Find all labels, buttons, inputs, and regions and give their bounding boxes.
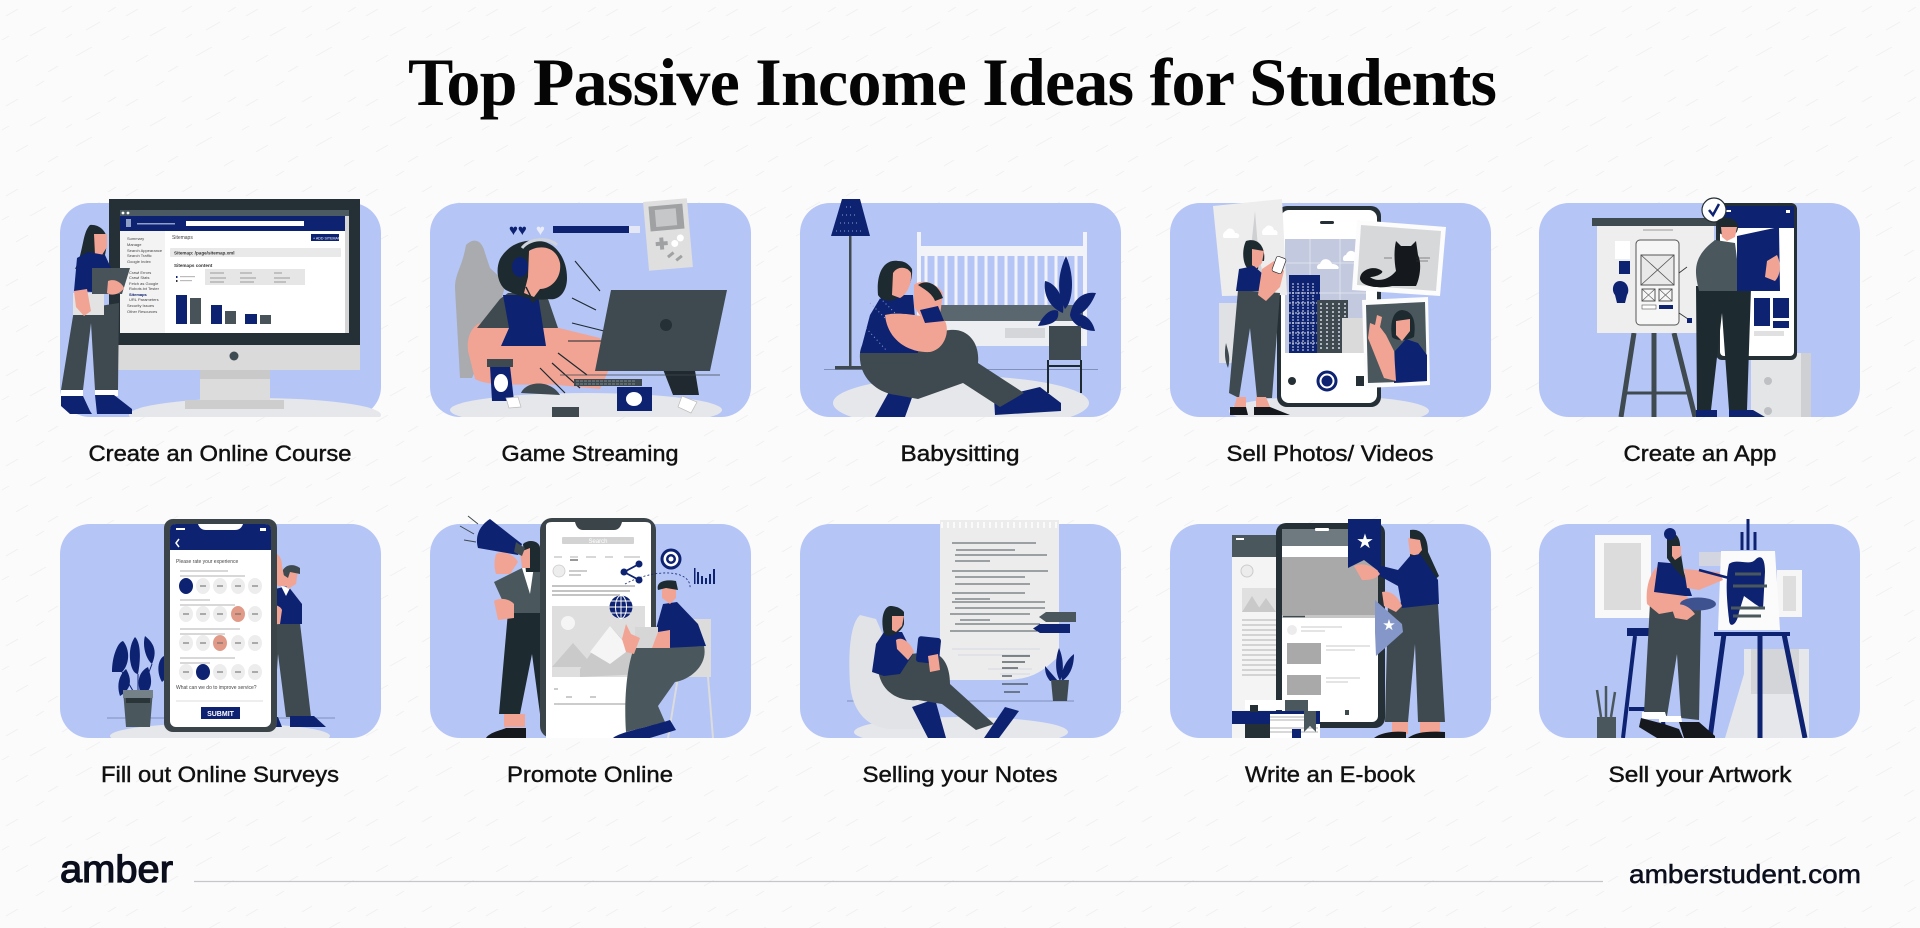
icon: paper bag <box>1725 649 1809 738</box>
icon: smartphone camera <box>1277 206 1381 407</box>
icon: potted plant <box>1038 256 1096 393</box>
panel: promote online <box>430 516 751 738</box>
icon: desktop monitor: Crawl Errors <box>129 270 151 275</box>
icon: gaming chair <box>455 241 506 378</box>
icon: baby crib <box>917 232 1087 346</box>
icon: bean bag chair <box>849 615 935 729</box>
figure: woman with megaphone <box>460 516 540 738</box>
label: sell photos/ videos: Sell Photos/ Videos <box>1226 441 1434 466</box>
submit button: SUBMIT <box>207 711 235 718</box>
bar chart <box>694 568 715 584</box>
icon: desktop monitor: Sitemaps content <box>174 263 213 268</box>
icon: megaphone <box>460 516 525 556</box>
icon: desktop monitor: Fetch as Google <box>129 281 159 286</box>
icon: arrow tags <box>1033 612 1076 633</box>
panel: babysitting <box>800 199 1121 430</box>
icon: ribbon badge: ★ <box>1382 617 1396 634</box>
icon: target <box>660 548 682 570</box>
panel: selling your notes <box>800 520 1121 747</box>
figure: painter <box>1639 528 1729 738</box>
icon: notebook page <box>940 520 1059 692</box>
icon: drawer cabinet <box>1751 353 1811 417</box>
icon: wall frames <box>1595 535 1802 618</box>
label: promote online: Promote Online <box>507 762 673 787</box>
icon: desktop monitor <box>109 199 360 409</box>
icon: desktop monitor: Summary <box>127 236 144 241</box>
icon: desktop monitor: Robots.txt Tester <box>129 286 160 291</box>
label: create an online course: Create an Online Course <box>88 441 352 466</box>
icon: stack of books <box>1232 700 1320 738</box>
icon: desktop monitor: Manage <box>127 242 142 247</box>
icon: ribbon badge <box>1375 600 1403 656</box>
icon: desktop monitor: Sitemaps <box>172 235 193 241</box>
icon: desktop monitor: + ADD SITEMAP <box>313 236 341 240</box>
icon: desktop monitor: Search Traffic <box>127 253 152 258</box>
icon: paint palette <box>1680 598 1716 610</box>
icon: computer monitor and keyboard <box>560 290 727 395</box>
icon: star bookmark <box>1348 519 1381 573</box>
icon: desktop monitor: Security Issues <box>127 303 154 308</box>
title: Top Passive Income Ideas for Students <box>408 44 1497 120</box>
label: create an app: Create an App <box>1624 441 1776 466</box>
figure: woman with tablet <box>61 225 132 414</box>
website url: amberstudent.com <box>1629 859 1861 889</box>
panel: fill out online surveys <box>60 519 381 749</box>
figure: mother holding baby <box>860 261 1061 417</box>
panel: sell your artwork <box>1539 519 1860 738</box>
bar chart <box>176 295 271 324</box>
icon: selfie photo <box>1362 297 1430 388</box>
icon: social phone: Search <box>588 539 608 545</box>
icon: brush jar <box>1597 686 1616 738</box>
icon: desktop monitor: Search Appearance <box>127 248 163 253</box>
panel: create an app <box>1539 198 1860 417</box>
icon: floor lamp <box>824 199 1098 370</box>
logo: amber: amber <box>60 849 173 891</box>
icon: hearts and level bar: ♥ <box>536 222 545 239</box>
icon: photo of cat <box>1352 220 1446 296</box>
icon: stool <box>1623 628 1665 738</box>
figure: man on chair with laptop <box>613 573 713 738</box>
icon: desktop monitor: Crawl Stats <box>129 275 149 280</box>
icon: small potted plant <box>1045 648 1074 701</box>
icon: back phone page <box>1232 535 1282 738</box>
icon: desktop monitor: URL Parameters <box>129 297 159 302</box>
figure: student reading <box>872 606 1019 738</box>
icon: social phone <box>540 518 656 738</box>
icon: smartphone prototype <box>1716 203 1797 360</box>
icon: easel with painting <box>1710 519 1805 738</box>
icon: desktop monitor: Sitemap: /page/sitemap.xml <box>174 250 235 256</box>
icon: handheld console <box>643 198 693 271</box>
figure: man with folder <box>1696 218 1780 417</box>
icon: star bookmark: ★ <box>1356 531 1374 553</box>
icon: share <box>620 560 642 584</box>
icon: survey phone: What can we do to improve service? <box>176 685 257 691</box>
icon: desktop monitor: Sitemaps <box>129 292 148 297</box>
icon: photo of tower <box>1213 199 1287 368</box>
figure: man behind phone <box>276 554 326 727</box>
label: fill out online surveys: Fill out Online Surveys <box>101 762 339 787</box>
icon: presentation board <box>1592 218 1716 417</box>
label: game streaming: Game Streaming <box>502 441 678 466</box>
icon: e-book phone <box>1276 523 1385 728</box>
icon: survey phone <box>164 519 277 732</box>
icon: hearts and level bar: ♥♥ <box>509 222 527 239</box>
panel: game streaming <box>430 198 751 427</box>
icon: desktop monitor: Other Resources <box>127 309 157 314</box>
icon: hearts and level bar <box>510 226 640 235</box>
icon: globe <box>610 596 632 618</box>
label: babysitting: Babysitting <box>900 441 1020 466</box>
icon: potted plant <box>112 636 169 727</box>
label: write an e-book: Write an E-book <box>1245 762 1416 787</box>
figure: woman with phone <box>1229 240 1290 415</box>
figure: streamer <box>468 240 612 395</box>
label: selling your notes: Selling your Notes <box>862 762 1058 787</box>
panel: sell photos and videos <box>1170 199 1491 426</box>
submit button <box>201 707 240 719</box>
label: sell your artwork: Sell your Artwork <box>1608 762 1792 787</box>
panel: create an online course <box>60 199 381 432</box>
panel: write an e-book <box>1170 519 1491 738</box>
icon: check mark badge <box>1702 198 1726 222</box>
icon: desktop monitor: Google Index <box>127 259 151 264</box>
figure: woman with bookmark <box>1354 530 1445 738</box>
icon: survey phone: Please rate your experience <box>176 559 238 565</box>
icon: coffee cup <box>487 359 514 401</box>
icon: navy box <box>506 387 697 417</box>
